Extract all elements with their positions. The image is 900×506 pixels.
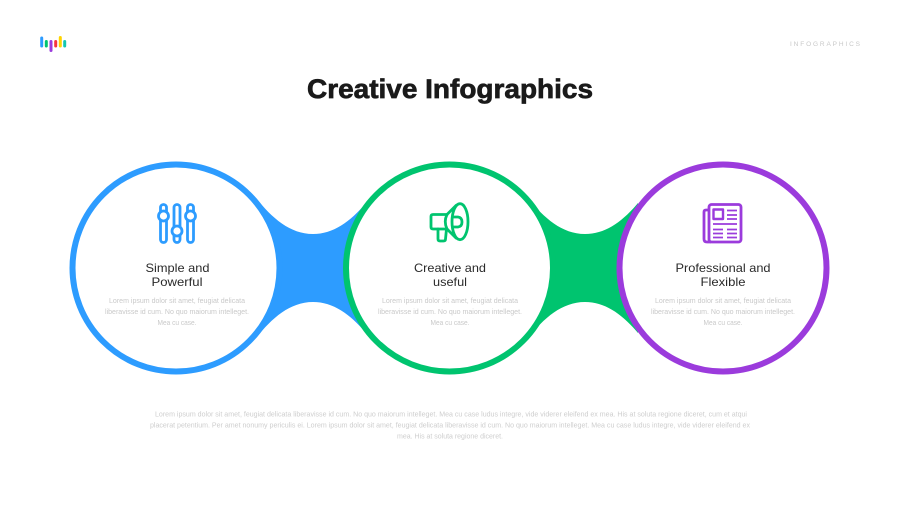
body text: Lorem ipsum dolor sit amet, feugiat delicata [655, 296, 792, 305]
panel: creative and useful [346, 164, 553, 372]
body text: liberavisse id cum. No quo maiorum intelleget. [378, 307, 522, 316]
body text: liberavisse id cum. No quo maiorum intelleget. [651, 307, 795, 316]
heading: Professional and [676, 261, 770, 275]
heading [146, 261, 210, 289]
footer text block: Lorem ipsum dolor sit amet, feugiat delicata liberavisse id cum. No quo maiorum intelleget. Mea cu case ludus integre, vide viderer eleifend ex mea. His at soluta regione diceret, cum et atqui [155, 410, 747, 418]
icon: megaphone [431, 204, 468, 241]
heading: Powerful [152, 275, 202, 289]
footer text block: mea. His at soluta regione diceret. [397, 432, 503, 440]
heading: Simple and [146, 261, 210, 275]
green ring [346, 164, 553, 372]
heading: Flexible [700, 275, 746, 289]
purple ring [620, 164, 826, 372]
green connector [528, 198, 638, 338]
icon: newspaper [704, 204, 741, 242]
footer text block: placerat petentium. Per amet nonumy periculis ei. Lorem ipsum dolor sit amet, feugiat delicata liberavisse id cum. No quo maiorum intelleget. Mea cu case ludus integre, vide viderer eleifend ex [150, 420, 750, 430]
blue connector [256, 198, 366, 338]
body text: Lorem ipsum dolor sit amet, feugiat delicata [109, 296, 246, 305]
top right label: INFOGRAPHICS [790, 41, 861, 48]
panel: simple and powerful [72, 164, 280, 372]
body text [651, 296, 795, 327]
body text: liberavisse id cum. No quo maiorum intelleget. [105, 307, 249, 316]
blue ring [72, 164, 280, 372]
logo [42, 38, 65, 50]
footer text block [150, 410, 750, 440]
icon: sliders [158, 204, 196, 242]
heading: useful [433, 275, 467, 289]
title: Creative Infographics [307, 74, 593, 104]
body text [105, 296, 249, 327]
body text [378, 296, 522, 327]
body text: Lorem ipsum dolor sit amet, feugiat delicata [382, 296, 519, 305]
heading [676, 261, 770, 289]
body text: Mea cu case. [158, 318, 196, 327]
body text: Mea cu case. [704, 318, 742, 327]
panel: professional and flexible [620, 164, 826, 372]
heading: Creative and [414, 261, 486, 275]
body text: Mea cu case. [430, 318, 470, 327]
heading [414, 261, 486, 289]
